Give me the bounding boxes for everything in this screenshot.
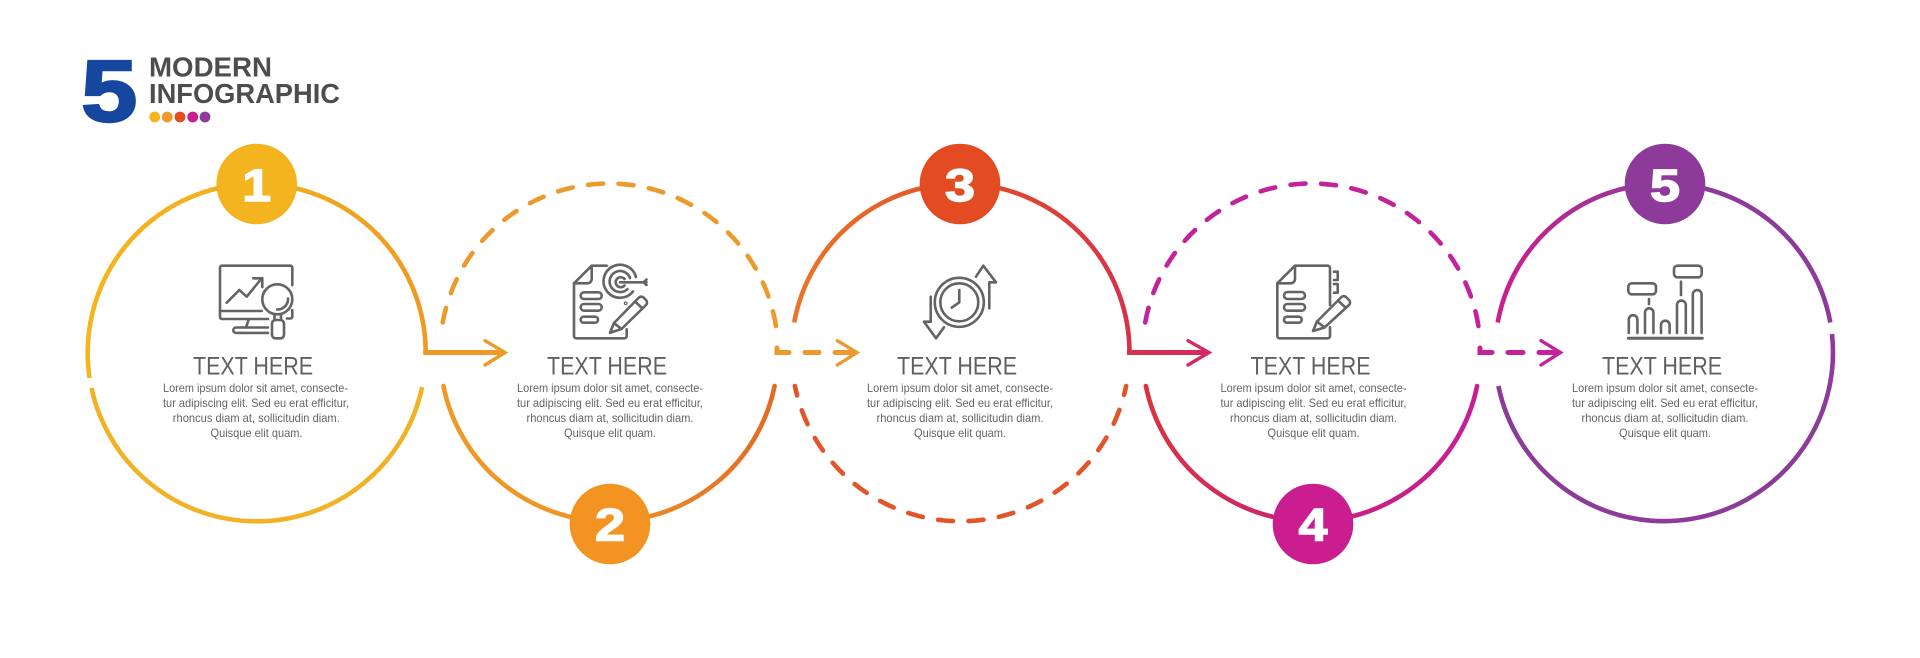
text: step 5 description: tur adipiscing elit. Sed eu erat efficitur, bbox=[1572, 396, 1758, 410]
ring: step 5 bbox=[1498, 184, 1833, 521]
logo numeral 5: 5 bbox=[81, 43, 137, 139]
text: step 5 description: Lorem ipsum dolor sit amet, consecte- bbox=[1572, 381, 1758, 395]
text: step 2 title: TEXT HERE bbox=[547, 352, 667, 380]
ring: step 2 bbox=[443, 184, 777, 521]
logo heading bbox=[149, 52, 340, 109]
ring: step 1 bbox=[88, 184, 426, 521]
text: step 2 description bbox=[517, 381, 703, 440]
badge: 2 bbox=[570, 484, 650, 564]
text: step 2 description: Lorem ipsum dolor sit amet, consecte- bbox=[517, 381, 703, 395]
panel: step 4 bbox=[1145, 184, 1560, 564]
arrow: step 4 to 5 bbox=[1480, 341, 1560, 365]
badge: 3: 3 bbox=[945, 160, 975, 211]
text: step 1 description: tur adipiscing elit. Sed eu erat efficitur, bbox=[163, 396, 349, 410]
text: step 4 description: Quisque elit quam. bbox=[1268, 426, 1360, 440]
logo colour dots bbox=[149, 112, 210, 122]
panel: step 2 bbox=[443, 184, 857, 564]
icon: bar chart with labels bbox=[1628, 266, 1702, 338]
icon: monitor with magnifier bbox=[220, 266, 292, 338]
badge: 1: 1 bbox=[242, 161, 271, 211]
text: step 4 description bbox=[1220, 381, 1406, 440]
panel: step 3 bbox=[794, 144, 1209, 521]
text: step 3 description: tur adipiscing elit. Sed eu erat efficitur, bbox=[867, 396, 1053, 410]
ring: step 3 bbox=[794, 184, 1130, 521]
panel: step 1 bbox=[88, 144, 505, 521]
text: step 2 description: Quisque elit quam. bbox=[564, 426, 656, 440]
text: step 4 description: Lorem ipsum dolor sit amet, consecte- bbox=[1220, 381, 1406, 395]
badge: 5: 5 bbox=[1650, 160, 1680, 211]
icon: clock with exchange arrows bbox=[924, 266, 996, 338]
text: step 4 description: rhoncus diam at, sollicitudin diam. bbox=[1230, 411, 1397, 425]
icon: document with target and pencil bbox=[574, 265, 647, 338]
logo heading: MODERN bbox=[149, 52, 272, 82]
text: step 3 title: TEXT HERE bbox=[897, 352, 1017, 380]
text: step 5 description bbox=[1572, 381, 1758, 440]
badge: 1 bbox=[216, 144, 297, 224]
logo: 5 modern infographic bbox=[81, 43, 340, 139]
badge: 4 bbox=[1273, 484, 1353, 564]
text: step 5 title: TEXT HERE bbox=[1602, 352, 1722, 380]
arrow: step 2 to 3 bbox=[777, 341, 857, 365]
text: step 2 description: rhoncus diam at, sollicitudin diam. bbox=[526, 411, 694, 425]
panel: step 5 bbox=[1498, 144, 1833, 521]
ring: step 4 bbox=[1145, 184, 1480, 521]
text: step 5 description: rhoncus diam at, sollicitudin diam. bbox=[1582, 411, 1748, 425]
arrow: step 1 to 2 bbox=[423, 341, 505, 365]
text: step 3 description: Quisque elit quam. bbox=[914, 426, 1006, 440]
badge: 4: 4 bbox=[1299, 501, 1327, 551]
logo heading: INFOGRAPHIC bbox=[149, 78, 340, 109]
arrow: step 3 to 4 bbox=[1127, 341, 1209, 365]
badge: 5 bbox=[1625, 144, 1705, 224]
text: step 5 description: Quisque elit quam. bbox=[1619, 426, 1711, 440]
text: step 1 title: TEXT HERE bbox=[193, 352, 313, 380]
text: step 4 description: tur adipiscing elit. Sed eu erat efficitur, bbox=[1220, 396, 1406, 410]
text: step 1 description bbox=[163, 381, 349, 440]
text: step 3 description bbox=[867, 381, 1053, 440]
icon: document with pencil bbox=[1277, 266, 1350, 338]
text: step 3 description: rhoncus diam at, sollicitudin diam. bbox=[876, 411, 1044, 425]
badge: 2: 2 bbox=[595, 500, 625, 550]
text: step 1 description: rhoncus diam at, sollicitudin diam. bbox=[173, 411, 340, 425]
badge: 3 bbox=[920, 144, 1000, 224]
text: step 1 description: Quisque elit quam. bbox=[210, 426, 302, 440]
text: step 3 description: Lorem ipsum dolor sit amet, consecte- bbox=[867, 381, 1053, 395]
text: step 1 description: Lorem ipsum dolor sit amet, consecte- bbox=[163, 381, 348, 395]
text: step 4 title: TEXT HERE bbox=[1250, 352, 1370, 380]
text: step 2 description: tur adipiscing elit. Sed eu erat efficitur, bbox=[517, 396, 703, 410]
